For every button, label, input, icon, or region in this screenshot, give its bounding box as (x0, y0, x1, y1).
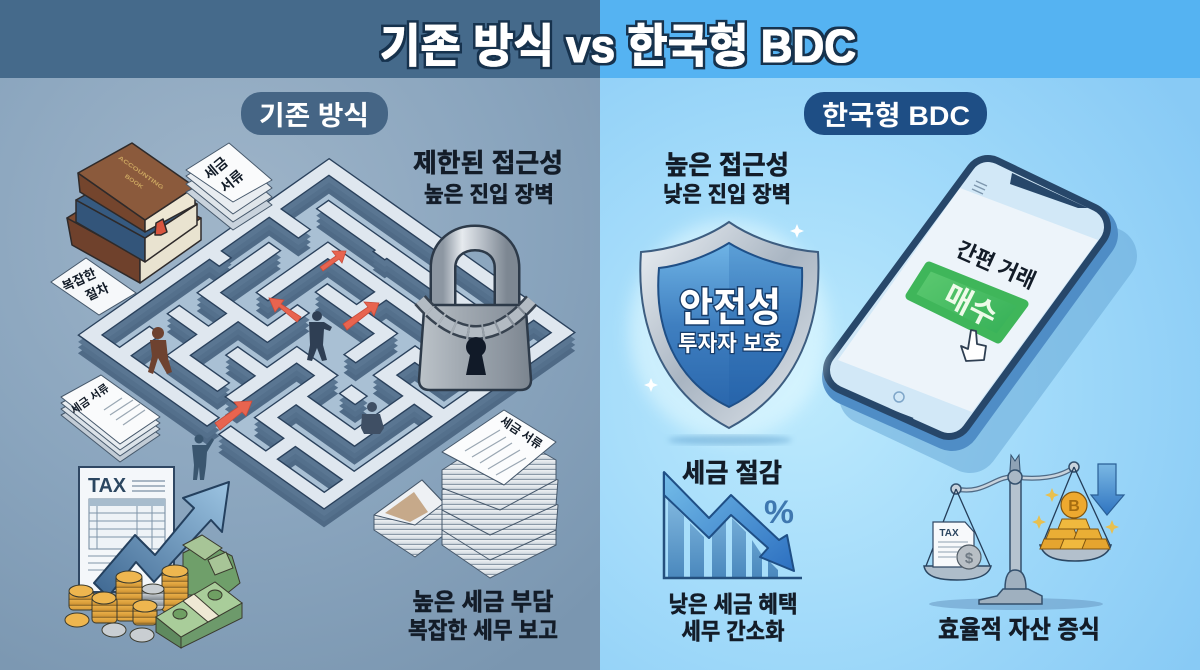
icon: hand cursor (961, 330, 986, 361)
button: 매수: 매수 (938, 279, 1002, 334)
heading pill: 기존 방식 (241, 92, 388, 135)
icon: paper stack 세금 서류: 서류 (217, 167, 247, 196)
text: 높은 접근성: 높은 접근성 (665, 150, 789, 180)
text: 높은 접근성: 낮은 진입 장벽 (663, 182, 791, 207)
text: 낮은 세금 혜택 (668, 591, 798, 644)
text: 낮은 세금 혜택: 세무 간소화 (682, 618, 784, 644)
icon: people in maze (148, 311, 384, 480)
icon: tax document (79, 467, 174, 592)
icon: tax document: TAX (88, 475, 127, 497)
callout: 복잡한 절차 (51, 258, 136, 315)
icon: gold bars and coin (1040, 492, 1110, 549)
icon: falling tax chart: % (764, 494, 794, 530)
icon: paper stack 세금 서류 (186, 143, 272, 230)
callout: 복잡한 절차: 복잡한 (60, 266, 99, 294)
right panel background (600, 0, 1200, 670)
text: 효율적 자산 증식: 효율적 자산 증식 (938, 616, 1100, 644)
text: 세금 절감: 세금 절감 (682, 458, 782, 488)
text: 제한된 접근성: 높은 진입 장벽 (424, 182, 554, 207)
label: 간편 거래: 간편 거래 (953, 237, 1040, 294)
text: 제한된 접근성: 제한된 접근성 (413, 148, 563, 178)
icon: paper stack 세금 서류: 세금 (201, 154, 231, 183)
icon: rising arrow (94, 482, 229, 597)
text: 높은 세금 부담 (408, 589, 558, 643)
icon: tax sheet on pan: $ (965, 550, 974, 567)
icon: shield: 안전성 (679, 286, 781, 330)
panel: 한국형 BDC (600, 0, 1200, 670)
icon: tax sheet on pan (933, 522, 981, 569)
callout: 복잡한 절차: 절차 (83, 280, 111, 304)
icon: falling tax chart (664, 472, 802, 578)
icon: down arrow (1091, 464, 1124, 515)
text: 제한된 접근성 (413, 148, 563, 207)
button: 매수 (910, 266, 1024, 339)
heading pill: 기존 방식: 기존 방식 (259, 101, 369, 131)
icon: paper stack left (61, 375, 160, 462)
heading pill: 한국형 BDC: 한국형 BDC (822, 101, 970, 131)
title banner (0, 0, 1200, 78)
text: 높은 세금 부담: 높은 세금 부담 (412, 589, 554, 616)
icon: maze (77, 160, 576, 519)
heading pill: 한국형 BDC (804, 92, 987, 135)
icon: paper stack left: 세금 서류 (68, 381, 112, 417)
icon: stacked books: ACCOUNTING (117, 155, 165, 191)
title: 기존 방식 vs 한국형 BDC (380, 20, 856, 72)
icon: balance scale (924, 455, 1124, 610)
icon: red path arrows (215, 251, 379, 430)
icon: stacked books (67, 143, 201, 283)
icon: coins and cash (65, 535, 242, 648)
text: 높은 접근성 (663, 150, 791, 207)
icon: padlock (419, 238, 532, 390)
icon: stacked books: BOOK (123, 173, 145, 191)
text: 낮은 세금 혜택: 낮은 세금 혜택 (668, 591, 798, 617)
icon: paper pile right (374, 410, 558, 578)
icon: paper pile right: 세금 서류 (498, 414, 545, 452)
icon: shield: 투자자 보호 (678, 331, 782, 356)
text: 높은 세금 부담: 복잡한 세무 보고 (408, 617, 558, 643)
icon: tax sheet on pan: TAX (939, 528, 959, 539)
icon: gold bars and coin: B (1068, 498, 1080, 515)
icon: shield (629, 220, 829, 445)
panel: 기존 방식 (0, 0, 600, 670)
icon: smartphone (838, 173, 1108, 444)
left panel background (0, 0, 600, 670)
